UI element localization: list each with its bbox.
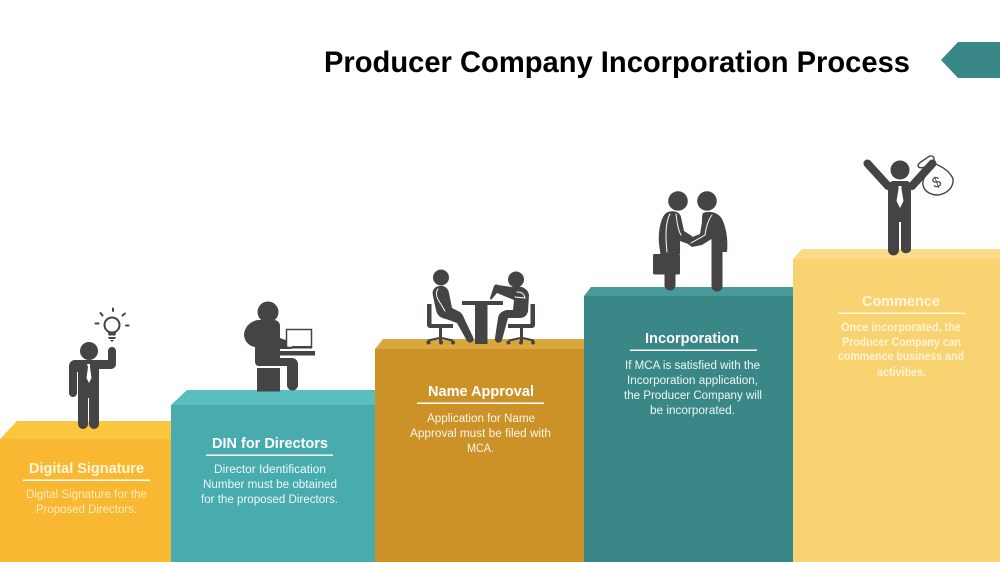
description: digital signature: Proposed Directors. <box>36 504 137 516</box>
description: commence: commence business and <box>838 351 964 363</box>
icon: handshake with briefcase <box>653 191 727 292</box>
right person <box>490 284 529 343</box>
left person <box>433 286 474 343</box>
description: din for directors <box>201 464 338 506</box>
description: commence: Producer Company can <box>842 337 961 349</box>
description: commence: Once incorporated, the <box>841 322 961 334</box>
description: commence: activities. <box>877 367 926 379</box>
step 1: digital signature <box>0 421 171 562</box>
money bag <box>923 163 953 195</box>
description: name approval: Application for Name <box>427 413 535 425</box>
heading: name approval: Name Approval <box>428 384 534 400</box>
table <box>462 301 503 344</box>
heading: commence: Commence <box>862 294 940 310</box>
step 3: name approval <box>375 339 584 562</box>
step 5: commence <box>793 249 1000 562</box>
heading: digital signature: Digital Signature <box>29 461 144 477</box>
description: incorporation: the Producer Company will <box>624 390 762 402</box>
step 4: incorporation <box>584 287 793 562</box>
arrow tab <box>941 42 1000 78</box>
description: incorporation: Incorporation application, <box>627 375 758 387</box>
icon: man with lightbulb <box>69 308 128 429</box>
description: name approval: MCA. <box>467 443 494 455</box>
description: din for directors: Number must be obtained <box>203 479 337 491</box>
description: din for directors: Director Identification <box>214 464 326 476</box>
icon: two people meeting at table <box>426 270 535 344</box>
right chair <box>508 304 535 341</box>
description: incorporation <box>624 360 762 417</box>
heading: incorporation: Incorporation <box>645 331 739 347</box>
left chair <box>427 304 453 341</box>
description: digital signature <box>26 489 147 516</box>
description: name approval: Approval must be filed with <box>410 428 551 440</box>
description: din for directors: for the proposed Directors. <box>201 494 338 506</box>
icon: man raising money bag: $ <box>930 173 944 192</box>
description: digital signature: Digital Signature for the <box>26 489 147 501</box>
title: Producer Company Incorporation Process <box>324 46 910 79</box>
heading: din for directors: DIN for Directors <box>212 436 328 452</box>
description: incorporation: be incorporated. <box>650 405 735 417</box>
description: incorporation: If MCA is satisfied with the <box>625 360 760 372</box>
icon: man raising money bag <box>868 156 953 256</box>
description: commence <box>838 322 964 379</box>
icon: person at laptop <box>244 302 315 392</box>
description: name approval <box>410 413 551 455</box>
step 2: din for directors <box>171 390 375 562</box>
